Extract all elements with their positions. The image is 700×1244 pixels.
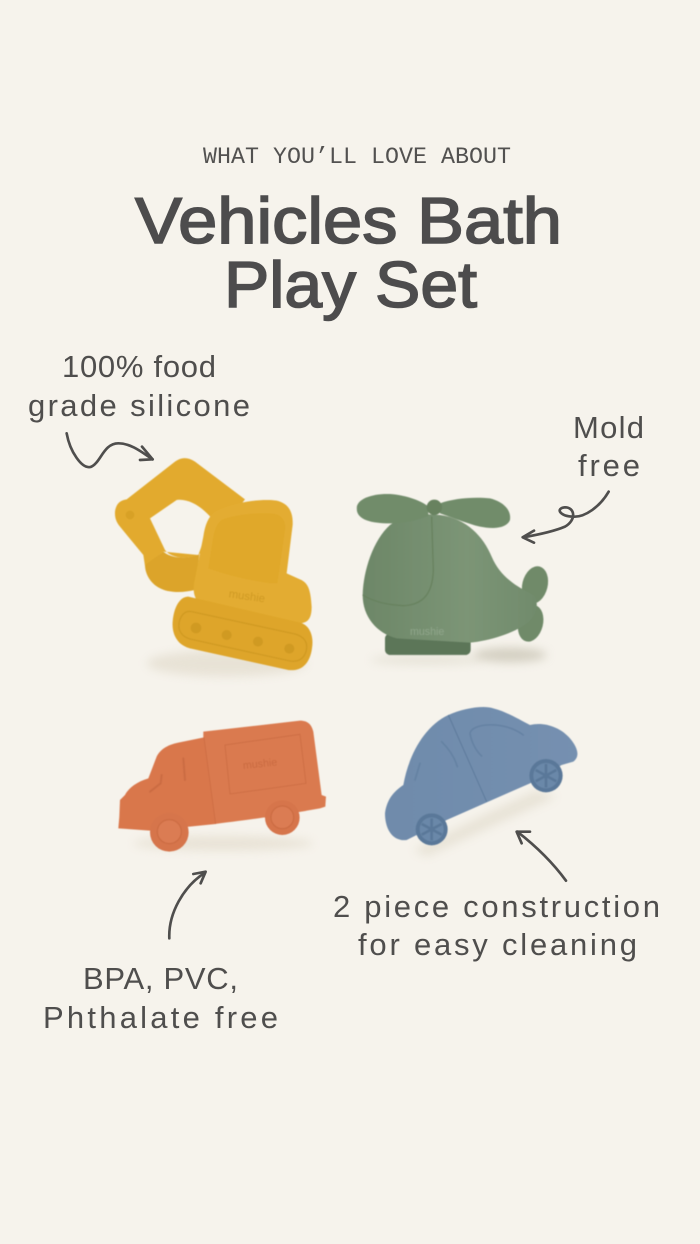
eyebrow heading: WHAT YOU’LL LOVE ABOUT <box>203 144 511 170</box>
callout: BPA PVC phthalate free: BPA, PVC, <box>83 961 238 996</box>
title: Vehicles Bath <box>135 184 562 257</box>
callout: food grade silicone: 100% food <box>62 349 216 384</box>
callout: 2 piece construction: for easy cleaning <box>358 927 637 962</box>
arrow: to car <box>517 832 566 881</box>
arrow: to helicopter <box>523 492 609 543</box>
arrow: to excavator <box>67 433 153 467</box>
toy: green helicopter <box>357 494 552 665</box>
toy: orange truck: mushie <box>242 756 278 772</box>
callout: BPA PVC phthalate free: Phthalate free <box>43 1000 278 1035</box>
title <box>135 184 562 321</box>
callout: mold free <box>573 410 644 483</box>
callout: mold free: Mold <box>573 410 644 445</box>
callout: food grade silicone <box>28 349 250 423</box>
title: Play Set <box>224 248 477 321</box>
callout: 2 piece construction: 2 piece construction <box>333 889 660 924</box>
toy: blue car <box>385 707 577 857</box>
toy: yellow excavator: mushie <box>228 588 266 605</box>
toy: green helicopter: mushie <box>410 626 444 638</box>
callout: food grade silicone: grade silicone <box>28 388 250 423</box>
toy: orange truck <box>118 721 326 852</box>
toy: yellow excavator <box>115 458 312 677</box>
arrow: to truck <box>169 872 206 938</box>
callout: BPA PVC phthalate free <box>43 961 278 1035</box>
callout: 2 piece construction <box>333 889 660 962</box>
callout: mold free: free <box>578 448 640 483</box>
